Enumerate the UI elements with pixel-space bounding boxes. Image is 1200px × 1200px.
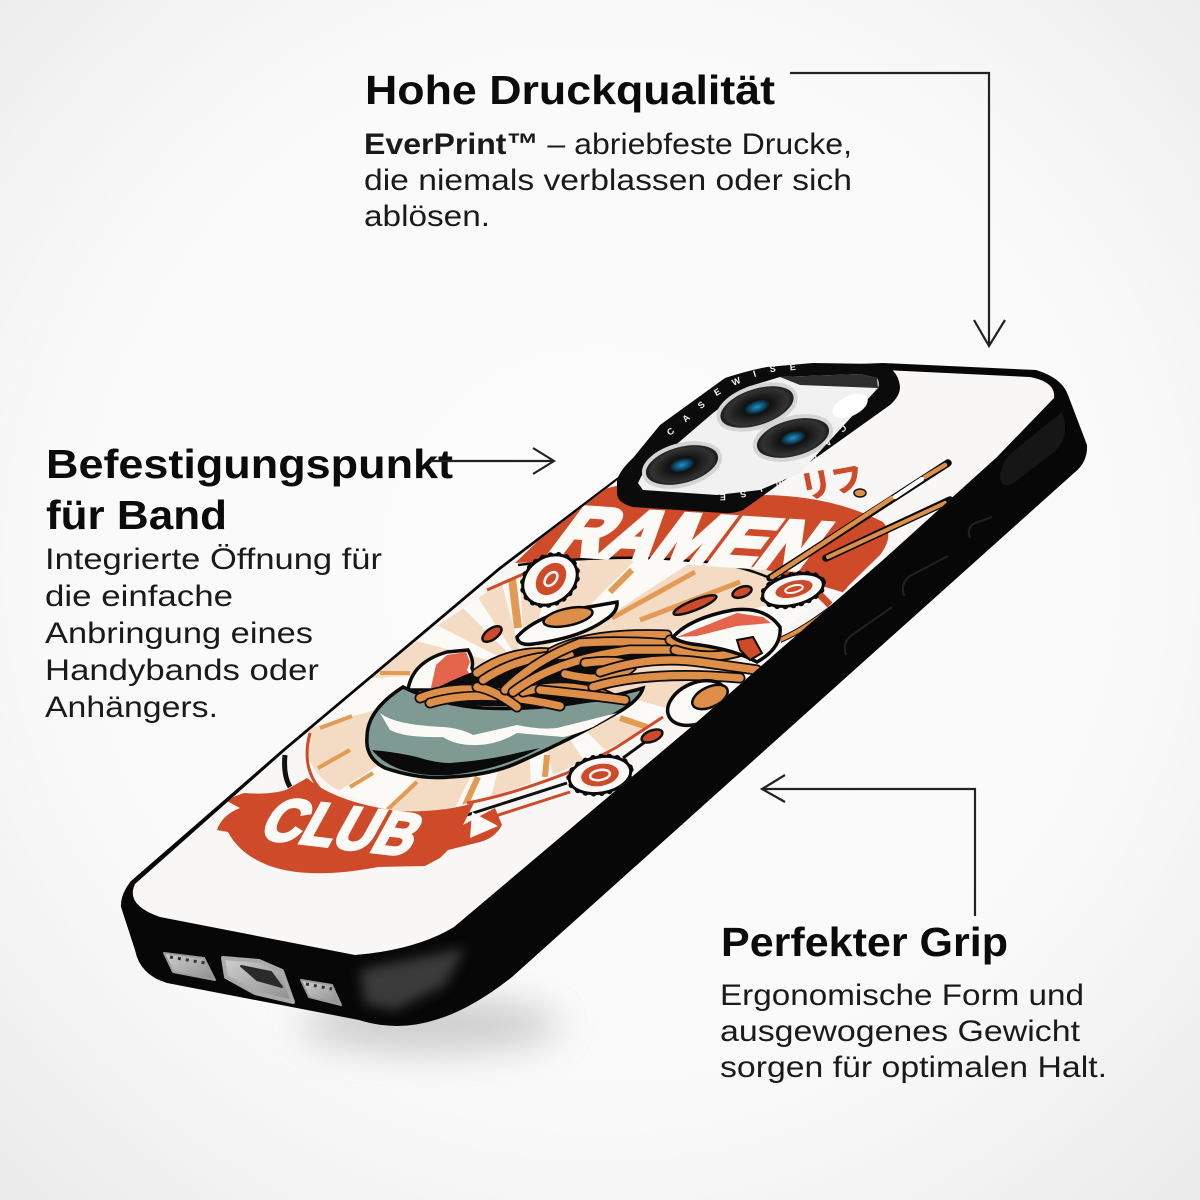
- top inner band: [780, 374, 878, 388]
- text block: grip description: sorgen für optimalen Halt.: [720, 1051, 1107, 1084]
- text block: EverPrint description: die niemals verblassen oder sich: [364, 164, 852, 197]
- text block: EverPrint description: EverPrint™ – abriebfeste Drucke,: [364, 128, 852, 161]
- text block: strap attachment description: Integrierte Öffnung für: [45, 543, 382, 576]
- text block: strap attachment description: [45, 543, 382, 724]
- right side strands: [780, 587, 848, 643]
- sun rays: [308, 559, 810, 812]
- phone shadow: [300, 997, 560, 1053]
- red stripe: [486, 572, 524, 592]
- heading: Befestigungspunkt für Band: Befestigungspunkt: [46, 441, 453, 487]
- back panel: [133, 370, 1054, 955]
- top banner: [515, 480, 888, 592]
- chashu left: [408, 650, 480, 692]
- speaker left: [164, 953, 215, 980]
- text block: grip description: ausgewogenes Gewicht: [720, 1015, 1081, 1048]
- camera island: [617, 363, 900, 514]
- text block: grip description: Ergonomische Form und: [720, 979, 1084, 1012]
- naruto fishcakes: [513, 545, 827, 798]
- text block: grip description: [720, 979, 1107, 1084]
- banner arc line: [518, 556, 768, 578]
- red ring lines: [285, 717, 663, 820]
- case body: [121, 363, 1087, 1026]
- japanese lettering: リフ: [797, 459, 866, 506]
- arrow: print quality: [790, 73, 1005, 346]
- heading: Befestigungspunkt für Band: für Band: [46, 492, 227, 538]
- lenses: [639, 376, 836, 494]
- corner highlight: [360, 948, 465, 1010]
- speaker right: [301, 980, 341, 1005]
- arrow: strap point: [430, 448, 554, 474]
- camera island: CASEWISE: [720, 426, 846, 500]
- small red dashes: [480, 584, 753, 745]
- CASEWISE rim text: CASEWISE: [667, 364, 796, 435]
- arrow: grip: [762, 775, 975, 916]
- egg lower: [666, 678, 729, 728]
- text block: strap attachment description: die einfache: [45, 580, 233, 613]
- text block: strap attachment description: Anbringung eines: [45, 617, 313, 650]
- phone case: [120, 363, 1088, 1026]
- CLUB lettering: CLUB: [250, 786, 436, 869]
- noodles: [418, 632, 757, 707]
- text block: strap attachment description: Anhängers.: [45, 691, 218, 724]
- egg top: [517, 602, 617, 644]
- CLUB banner: [217, 778, 502, 873]
- ribbon end: [470, 812, 498, 838]
- text block: strap attachment description: Handybands oder: [45, 654, 319, 687]
- charging port: [223, 958, 293, 1002]
- bowl: [367, 687, 643, 778]
- chashu right: [673, 609, 780, 662]
- heading: Befestigungspunkt für Band: [46, 441, 453, 538]
- heading: Perfekter Grip: Perfekter Grip: [721, 919, 1008, 965]
- side button recess: [1000, 412, 1065, 485]
- text block: EverPrint description: [364, 128, 852, 233]
- side buttons: [845, 517, 992, 655]
- text block: EverPrint description: ablösen.: [364, 200, 490, 233]
- chopsticks: [770, 463, 950, 578]
- RAMEN lettering: RAMEN: [535, 493, 847, 584]
- lens plate: [638, 374, 879, 495]
- illustration: ramen artwork: [217, 459, 952, 874]
- flash: [829, 389, 871, 423]
- heading: Hohe Druckqualität: Hohe Druckqualität: [365, 67, 775, 113]
